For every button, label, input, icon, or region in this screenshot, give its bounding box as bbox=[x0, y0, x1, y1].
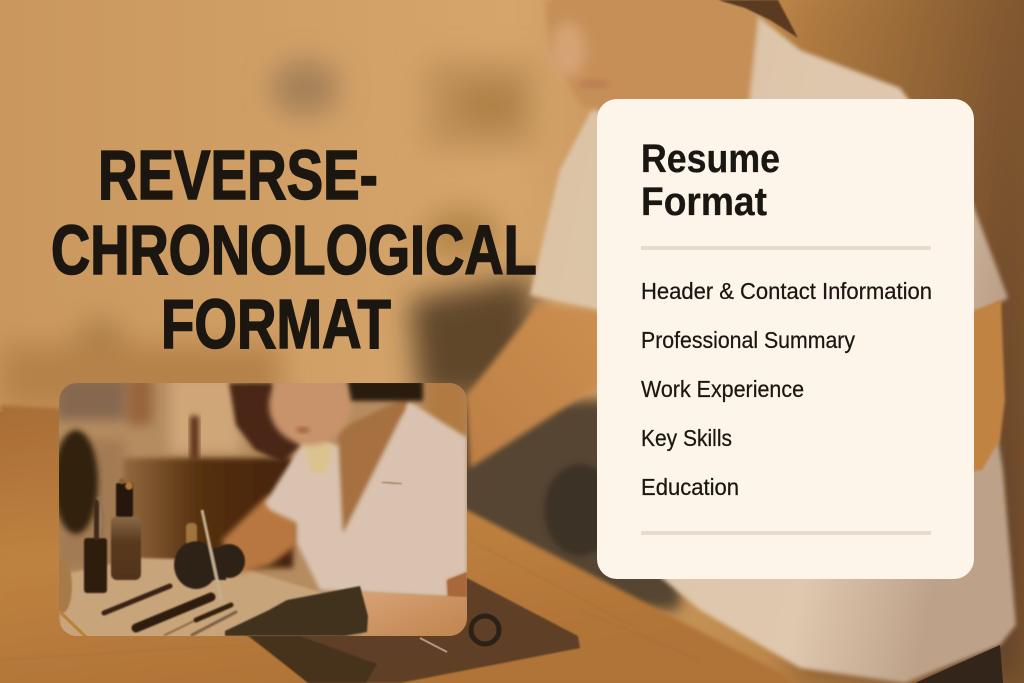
background: hair bbox=[718, 0, 798, 38]
inset: wall shading bbox=[55, 375, 470, 570]
card list bbox=[641, 278, 932, 500]
title: FORMAT bbox=[161, 286, 391, 364]
card list: Key Skills bbox=[641, 425, 732, 451]
inset: gloved hand holding tool bbox=[174, 510, 245, 603]
card heading: Resume bbox=[641, 137, 780, 181]
inset: gold ring edge bbox=[60, 612, 86, 637]
inset: neck bbox=[338, 395, 410, 533]
background: person's shirt bbox=[530, 14, 1016, 683]
inset: bottle bbox=[111, 478, 141, 580]
inset: front forearm bbox=[360, 592, 467, 636]
inset: forearm bbox=[222, 495, 297, 575]
background: glove bbox=[544, 464, 616, 556]
background: tool on mat bbox=[420, 638, 447, 652]
inset: top hair bbox=[348, 380, 423, 401]
background: face highlight bbox=[550, 22, 586, 78]
inset: face bbox=[265, 383, 354, 448]
background: table top bbox=[0, 405, 800, 683]
title bbox=[51, 135, 537, 364]
background: table base bbox=[0, 412, 790, 683]
inset: combs bbox=[104, 586, 236, 635]
inset: desk bbox=[60, 558, 340, 640]
inset: lips bbox=[296, 427, 310, 433]
card list: Professional Summary bbox=[641, 327, 855, 353]
card list: Work Experience bbox=[641, 376, 804, 402]
background: pants bbox=[915, 645, 1003, 683]
inset: dark furniture bbox=[123, 458, 293, 568]
background: coil bbox=[471, 616, 499, 644]
inset: hair bbox=[229, 383, 300, 463]
card heading bbox=[641, 137, 780, 224]
inset: upper arm stub bbox=[447, 572, 467, 600]
card list: Education bbox=[641, 474, 739, 500]
background: face base bbox=[552, 0, 752, 105]
inset: dark left shape bbox=[54, 430, 98, 534]
title: CHRONOLOGICAL bbox=[51, 211, 537, 290]
background: wood grain bbox=[0, 540, 700, 660]
background: lips bbox=[579, 79, 611, 89]
inset: small bottle with scissors bbox=[84, 497, 107, 593]
background: keyboard tray bbox=[250, 636, 377, 683]
card list: Header & Contact Information bbox=[641, 278, 932, 304]
inset: shirt bbox=[265, 400, 467, 597]
background: right arm bbox=[970, 300, 1005, 472]
inset: collar cream bbox=[303, 437, 333, 475]
inset: furniture post bbox=[190, 416, 199, 460]
inset: shirt fold bbox=[382, 482, 402, 484]
inset photo: technician at desk bbox=[59, 383, 467, 636]
inset: gold object bbox=[59, 559, 72, 613]
card: resume format bbox=[597, 99, 974, 579]
background: mat bbox=[240, 578, 580, 683]
title: REVERSE- bbox=[98, 135, 378, 214]
background: person's left arm bbox=[466, 305, 600, 468]
background: person's face and neck bbox=[545, 0, 760, 125]
card heading: Format bbox=[641, 180, 767, 224]
background: dark area beside arm bbox=[440, 400, 680, 610]
inset: front glove bbox=[225, 586, 368, 636]
